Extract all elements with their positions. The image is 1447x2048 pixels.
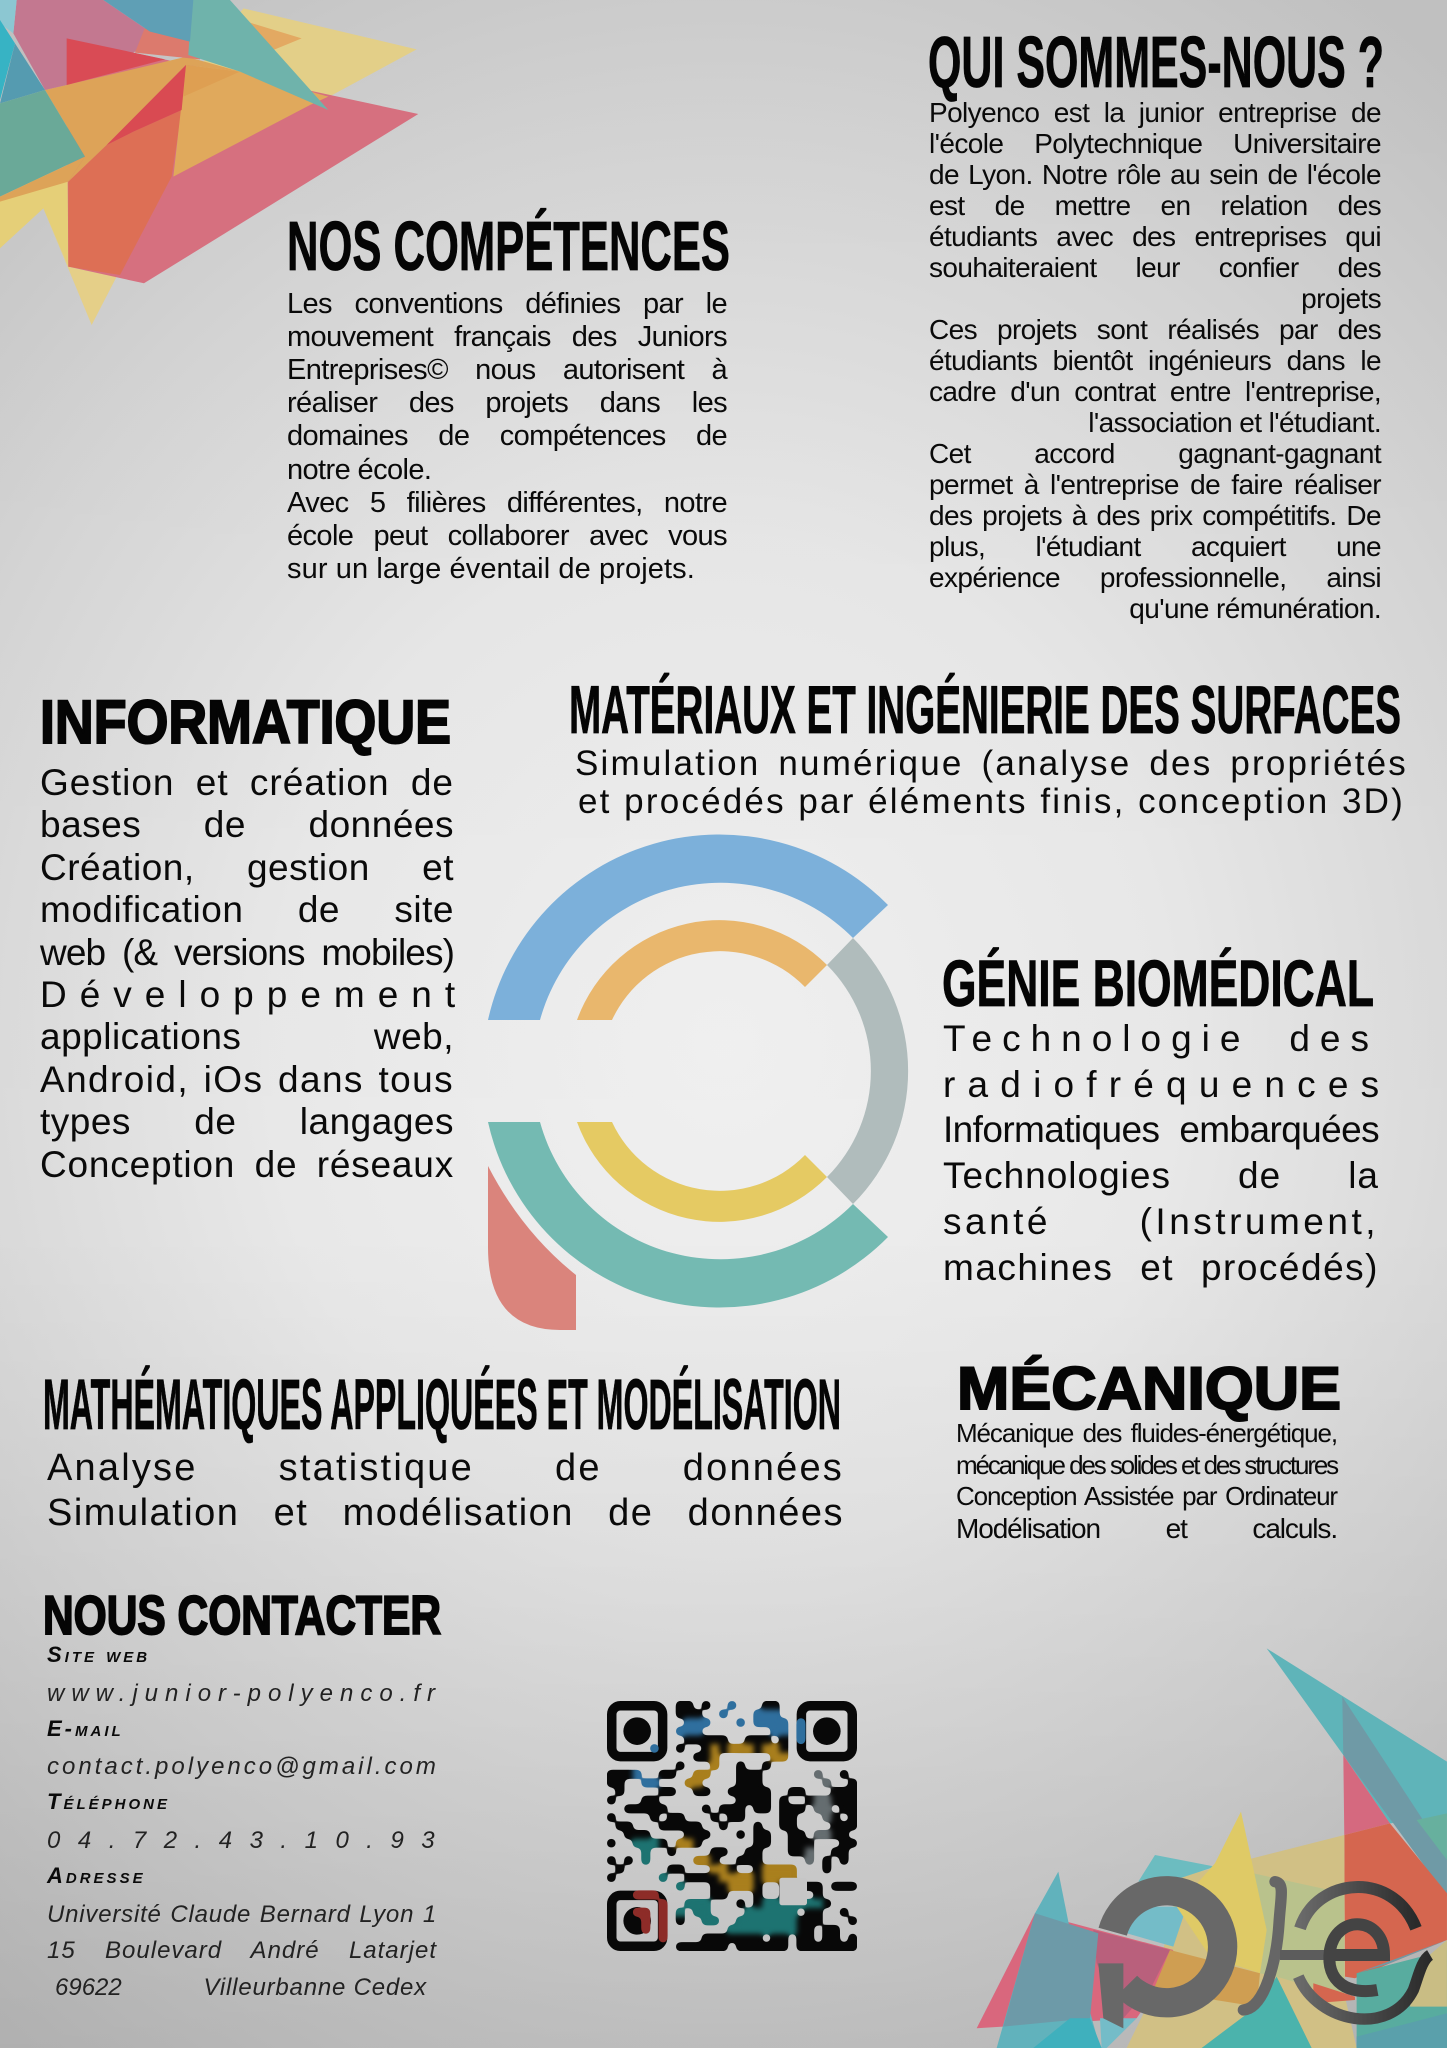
contact details: www.junior-polyenco.fr: [47, 1680, 442, 1707]
text block: mouvement français des Juniors: [287, 321, 727, 353]
text block: Simulation numérique (analyse des propriétés: [575, 744, 1408, 783]
contact details: contact.polyenco@gmail.com: [47, 1753, 439, 1780]
finder patterns: [612, 1706, 852, 1946]
grey arc: [827, 938, 908, 1204]
text block: Gestion et création de: [40, 762, 454, 803]
logo: central ring: [488, 834, 908, 1330]
heading: MÉCANIQUE: [957, 1355, 1341, 1422]
contact details: Villeurbanne Cedex: [204, 1974, 427, 2001]
text block: [40, 762, 468, 1185]
text block: étudiants bientôt ingénieurs dans le: [929, 345, 1381, 376]
text block: Développement: [40, 974, 468, 1015]
text block: types de langages: [40, 1101, 454, 1142]
text block: étudiants avec des entreprises qui: [929, 221, 1381, 252]
orange arc: [577, 920, 827, 1020]
text block: Avec 5 filières différentes, notre: [287, 487, 727, 519]
text block: Les conventions définies par le: [287, 288, 727, 320]
text block: sur un large éventail de projets.: [287, 553, 695, 585]
teal arc: [488, 1122, 888, 1308]
panel: informatique: [40, 688, 468, 1185]
text block: souhaiteraient leur confier des: [929, 252, 1381, 283]
text block: Informatiques embarquées: [943, 1109, 1379, 1150]
text block: Conception Assistée par Ordinateur: [956, 1481, 1337, 1511]
text block: permet à l'entreprise de faire réaliser: [929, 469, 1381, 500]
text block: Entreprises© nous autorisent à: [287, 354, 727, 386]
text block: [287, 288, 728, 585]
text block: est de mettre en relation des: [929, 190, 1381, 221]
text block: Analyse statistique de données: [47, 1447, 844, 1489]
text block: plus, l'étudiant acquiert une: [929, 531, 1381, 562]
contact details: 69622: [55, 1974, 122, 2001]
text block: Technologies de la: [943, 1155, 1379, 1196]
text block: l'école Polytechnique Universitaire: [929, 128, 1381, 159]
text block: expérience professionnelle, ainsi: [929, 562, 1381, 593]
panel: qui sommes-nous: [928, 23, 1384, 624]
text block: applications web,: [40, 1016, 454, 1057]
text block: et procédés par éléments finis, conception 3D): [578, 782, 1405, 820]
text block: mécanique des solides et des structures: [956, 1450, 1337, 1480]
text block: Ces projets sont réalisés par des: [929, 314, 1381, 345]
contact details: 04.72.43.10.93: [47, 1827, 452, 1854]
text block: de Lyon. Notre rôle au sein de l'école: [929, 159, 1381, 190]
logo: polyenco junior entreprise mark: [1098, 1876, 1433, 2028]
contact details: [46, 1642, 452, 2001]
text block: Création, gestion et: [40, 847, 454, 888]
text block: Modélisation et calculs.: [956, 1513, 1337, 1544]
text block: web (& versions mobiles): [40, 932, 454, 973]
coral leaf: [488, 1166, 576, 1330]
text block: bases de données: [40, 804, 454, 845]
panel: nous contacter: [43, 1584, 452, 2001]
text block: santé (Instrument,: [943, 1201, 1379, 1242]
text block: réaliser des projets dans les: [287, 387, 727, 419]
text block: modification de site: [40, 889, 454, 930]
text block: [943, 1018, 1391, 1288]
panel: mecanique: [956, 1354, 1341, 1544]
text block: [47, 1447, 844, 1534]
text block: domaines de compétences de: [287, 420, 727, 452]
panel: nos competences: [287, 207, 730, 585]
heading: NOS COMPÉTENCES: [287, 207, 730, 285]
alignment pattern: [779, 1878, 807, 1905]
contact details: Téléphone: [47, 1789, 170, 1814]
blue arc: [488, 834, 888, 1020]
heading: INFORMATIQUE: [40, 688, 451, 756]
text block: Simulation et modélisation de données: [47, 1492, 844, 1534]
contact details: Adresse: [47, 1863, 146, 1888]
text block: [575, 744, 1408, 820]
triangles top left: [0, 0, 418, 325]
text block: Android, iOs dans tous: [40, 1059, 454, 1100]
contact details: E-mail: [47, 1716, 124, 1741]
text block: des projets à des prix compétitifs. De: [929, 500, 1381, 531]
text block: projets: [1301, 283, 1381, 314]
text block: Technologie des: [943, 1018, 1379, 1059]
qr code: [607, 1701, 857, 1951]
panel: mathematiques: [43, 1365, 844, 1534]
text block: notre école.: [287, 454, 431, 486]
contact details: 15 Boulevard André Latarjet: [47, 1937, 437, 1964]
text block: radiofréquences: [943, 1064, 1391, 1105]
text block: [929, 97, 1382, 624]
text block: qu'une rémunération.: [1129, 593, 1381, 624]
text block: Conception de réseaux: [40, 1144, 454, 1185]
text block: [956, 1418, 1338, 1544]
text block: école peut collaborer avec vous: [287, 520, 727, 552]
contact details: Université Claude Bernard Lyon 1: [47, 1901, 437, 1928]
panel: materiaux: [569, 672, 1408, 820]
text block: Cet accord gagnant-gagnant: [929, 438, 1381, 469]
text block: Mécanique des fluides-énergétique,: [956, 1418, 1337, 1448]
data modules: [607, 1701, 857, 1951]
yellow arc: [577, 1122, 827, 1222]
contact details: Site web: [47, 1642, 150, 1667]
text block: machines et procédés): [943, 1247, 1379, 1288]
text block: cadre d'un contrat entre l'entreprise,: [929, 376, 1381, 407]
heading: NOUS CONTACTER: [43, 1584, 441, 1646]
text block: Polyenco est la junior entreprise de: [929, 97, 1381, 128]
panel: genie biomedical: [942, 946, 1391, 1288]
text block: l'association et l'étudiant.: [1088, 407, 1381, 438]
triangles bottom right: [977, 1648, 1447, 2048]
